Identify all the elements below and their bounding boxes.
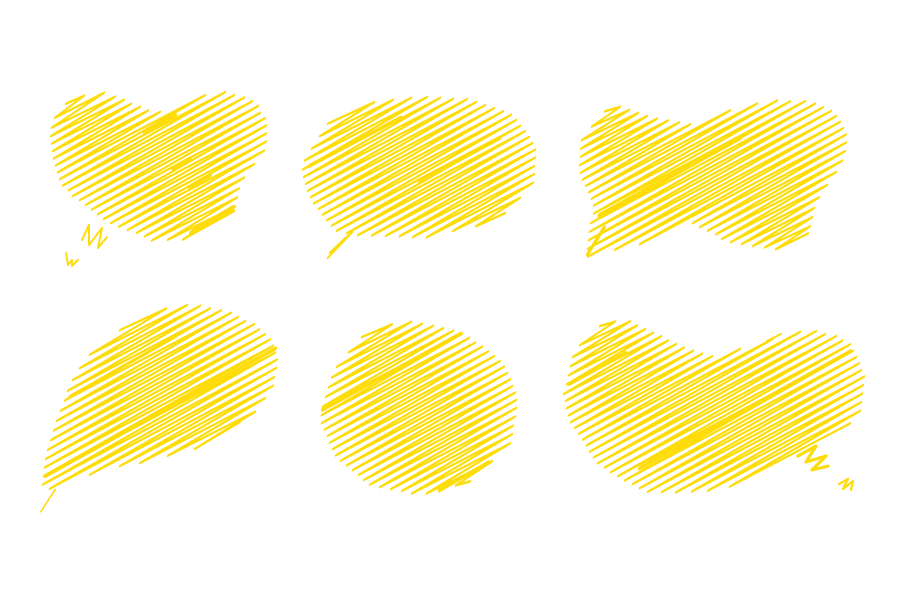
- bubble: teardrop with bottom-left tail: [41, 244, 277, 533]
- tail stroke: [41, 490, 55, 511]
- thought scribble small: [66, 253, 78, 266]
- thought scribble large: [798, 446, 828, 470]
- bubble: heart shaped with thought scribbles: [51, 0, 266, 312]
- tail: [328, 232, 352, 258]
- stray stroke: [767, 334, 781, 341]
- thought scribble small: [839, 479, 853, 490]
- bubble: oval with tail: [303, 10, 535, 324]
- bubble: peanut shape with tail: [580, 0, 846, 359]
- bubble: cloud shape with thought scribbles: [564, 181, 864, 581]
- bubble: round: [322, 252, 516, 563]
- thought scribble large: [82, 225, 107, 248]
